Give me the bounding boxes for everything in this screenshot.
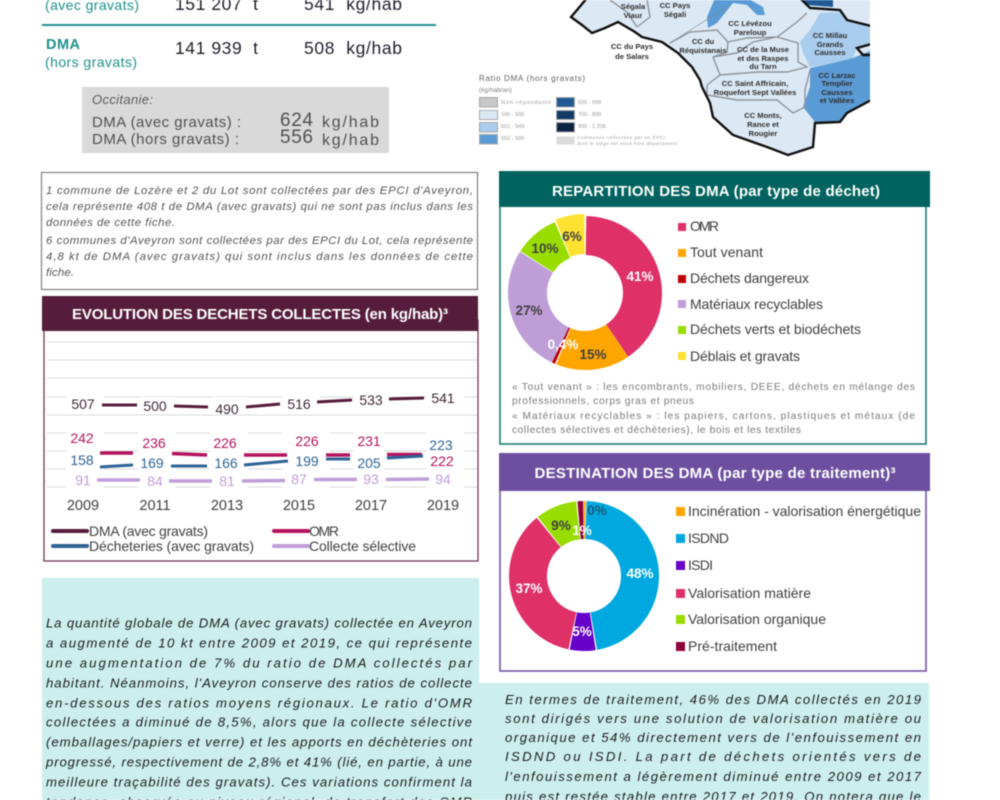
definitions text: professionnels, corps gras et pneus <box>512 396 694 407</box>
donut chart: waste types: 10% <box>531 241 559 256</box>
note box: communes outside the department: fiche. <box>46 267 74 279</box>
text block: collection commentary: une augmentation de 7% du ratio de DMA collectés par <box>46 656 473 670</box>
map labels <box>611 1 856 138</box>
key figures table: 141 939 t <box>175 38 258 58</box>
map labels: CC Saint Affricain, <box>722 79 788 88</box>
legend: treatment types <box>676 503 921 654</box>
text block: collection commentary: progressé, respectivement de 2,8% et 41% (lié, en partie, à une <box>45 754 472 770</box>
legend: treatment types: ISDND <box>688 530 729 546</box>
line chart: 169 <box>140 455 164 471</box>
map labels: et Vallées <box>820 96 854 105</box>
map legend: Non-répondants <box>501 100 551 106</box>
donut chart: treatment types: 1% <box>572 523 592 538</box>
map labels: Causses <box>814 48 846 57</box>
heading: destination <box>499 453 930 491</box>
map legend: Ratio DMA (hors gravats) <box>479 74 585 83</box>
line chart: 2009 <box>67 498 99 514</box>
map legend: 501 - 549 <box>501 124 524 130</box>
legend: waste types: Déchets dangereux <box>690 270 809 286</box>
map labels: CC Pays <box>660 1 690 10</box>
text block: treatment commentary: En termes de traitement, 46% des DMA collectés en 2019 <box>505 692 922 707</box>
heading: evolution <box>42 296 478 331</box>
donut chart: treatment types: 48% <box>626 566 654 581</box>
line chart: 2017 <box>355 498 387 514</box>
map: DMA ratio by EPCI <box>571 0 875 155</box>
donut chart: treatment types: 0% <box>587 503 607 518</box>
line chart: 222 <box>430 453 454 469</box>
donut chart: treatment types <box>505 497 663 655</box>
line chart: 226 <box>295 433 319 449</box>
chart legend: OMR <box>309 523 339 539</box>
key figures table: 508 kg/hab <box>304 38 402 58</box>
chart legend: Décheteries (avec gravats) <box>89 538 254 554</box>
donut chart: waste types: 6% <box>562 229 582 244</box>
map labels: Rance et <box>747 120 779 129</box>
panel: evolution of collected waste <box>42 296 478 561</box>
map legend <box>479 74 678 146</box>
note box: communes outside the department: 4,8 kt de DMA (avec gravats) qui sont inclus dans les données de cette <box>46 251 473 263</box>
map labels: Rougier <box>749 129 777 138</box>
note box: communes outside the department <box>42 172 478 290</box>
donut chart: waste types <box>505 213 665 373</box>
legend: treatment types: Incinération - valorisation énergétique <box>688 503 921 519</box>
line chart: 91 <box>75 472 91 488</box>
line chart: 87 <box>291 471 307 487</box>
legend: waste types: Déblais et gravats <box>690 348 800 364</box>
line chart: 242 <box>70 430 94 446</box>
text block: collection commentary: (emballages/papiers et verre) et les apports en déchèteries ont <box>46 734 473 750</box>
map labels: du Tarn <box>749 62 777 71</box>
note box: communes outside the department: 1 commune de Lozère et 2 du Lot sont collectées par des EPCI d'Aveyron, <box>46 185 473 197</box>
note box: communes outside the department: 6 communes d'Aveyron sont collectées par des EPCI du Lot, cela représente <box>46 235 473 247</box>
regional comparison box: Occitanie: Occitanie: <box>92 92 153 107</box>
line chart <box>66 390 464 514</box>
map labels: Viaur <box>624 11 642 20</box>
key figures table: DMA <box>46 37 81 53</box>
text block: collection commentary: en-dessous des ratios moyens régionaux. Le ratio d'OMR <box>46 696 472 710</box>
text block: collection commentary: collectées a diminué de 8,5%, alors que la collecte sélective <box>46 714 472 730</box>
chart legend <box>53 523 416 554</box>
panel: destination by treatment <box>499 453 930 671</box>
donut chart: treatment types: 5% <box>572 624 592 639</box>
line chart: 507 <box>71 396 95 412</box>
text block: treatment commentary: organique et 54% directement vers de l'enfouissement en <box>505 730 921 745</box>
map legend: Communes collectées par un EPCI <box>577 135 665 140</box>
heading: distribution <box>499 171 930 207</box>
line chart: 199 <box>295 453 319 469</box>
key figures table: (hors gravats) <box>45 54 137 70</box>
regional comparison box: Occitanie: DMA (avec gravats) : <box>92 114 241 131</box>
legend: treatment types: Valorisation organique <box>688 611 826 627</box>
text block: treatment commentary: ISDND ou ISDI. La part de déchets orientés vers de <box>505 749 921 764</box>
panel: distribution by waste type <box>499 171 930 444</box>
text block: treatment commentary: l'enfouissement a légèrement diminué entre 2009 et 2017 <box>505 769 922 784</box>
line chart: 94 <box>435 471 451 487</box>
line chart: 2019 <box>427 498 459 514</box>
line chart: 166 <box>214 455 238 471</box>
heading: destination: DESTINATION DES DMA (par type de traitement)³ <box>534 465 896 482</box>
map labels: Templier <box>821 79 853 88</box>
map labels: Roquefort Sept Vallées <box>714 88 796 97</box>
regional comparison box: Occitanie: 556 <box>280 127 313 148</box>
definitions text <box>512 382 915 436</box>
map labels: Pareloup <box>734 28 767 37</box>
text block: collection commentary: a augmenté de 10 kt entre 2009 et 2019, ce qui représente <box>46 636 472 650</box>
note box: communes outside the department: cela représente 408 t de DMA (avec gravats) qui ne sont pas inclus dans les <box>46 201 473 213</box>
chart legend: DMA (avec gravats) <box>89 523 208 539</box>
donut chart: treatment types: 9% <box>551 518 571 533</box>
map legend: (kg/hab/an) <box>479 87 512 94</box>
line chart: 84 <box>147 473 163 489</box>
key figures table <box>42 0 436 70</box>
donut chart: waste types: 41% <box>626 269 654 284</box>
line chart: 236 <box>142 435 166 451</box>
line chart: 2011 <box>139 498 171 514</box>
line chart: 541 <box>431 390 455 406</box>
definitions text: « Matériaux recyclables » : les papiers, cartons, plastiques et métaux (de <box>512 411 915 422</box>
text block: collection commentary <box>42 578 479 800</box>
regional comparison box: Occitanie: kg/hab <box>322 132 379 149</box>
line chart: 2015 <box>283 498 315 514</box>
regional comparison box: Occitanie: kg/hab <box>322 114 379 131</box>
map labels: Réquistanais <box>679 46 727 55</box>
line chart: 158 <box>70 452 94 468</box>
map legend: dont le siège est situé hors département <box>577 141 678 146</box>
heading: evolution: EVOLUTION DES DECHETS COLLECTES (en kg/hab)³ <box>72 306 448 323</box>
line chart: 81 <box>219 473 235 489</box>
map labels: Ségali <box>664 10 686 19</box>
text block: treatment commentary: sont dirigés vers une solution de valorisation matière ou <box>505 711 922 726</box>
donut chart: waste types: 0,4% <box>548 337 578 352</box>
legend: waste types: Tout venant <box>690 244 763 260</box>
line chart: 93 <box>363 471 379 487</box>
definitions text: collectes sélectives et déchèteries), le bois et les textiles <box>512 425 801 436</box>
line chart: 490 <box>215 401 239 417</box>
map labels: CC de la Muse <box>737 45 789 54</box>
map labels: de Salars <box>615 52 649 61</box>
map legend: 600 - 699 <box>578 100 601 106</box>
map labels: CC du Pays <box>611 42 653 51</box>
text block: collection commentary: habitant. Néanmoins, l'Aveyron conserve des ratios de collecte <box>46 676 472 690</box>
line chart: 533 <box>359 392 383 408</box>
regional comparison box: Occitanie: 624 <box>280 110 313 131</box>
legend: waste types: Déchets verts et biodéchets <box>690 321 861 337</box>
donut chart: waste types: 15% <box>579 347 607 362</box>
line chart: 226 <box>213 435 237 451</box>
line chart: 2013 <box>211 498 243 514</box>
text block: collection commentary: La quantité globale de DMA (avec gravats) collectée en Aveyron <box>46 616 472 630</box>
legend: waste types: Matériaux recyclables <box>690 296 823 312</box>
note box: communes outside the department: données de cette fiche. <box>46 217 175 229</box>
legend: treatment types: ISDI <box>688 557 713 573</box>
donut chart: waste types: 27% <box>515 303 543 318</box>
legend: treatment types: Valorisation matière <box>688 585 811 601</box>
donut chart: treatment types: 37% <box>515 581 543 596</box>
regional comparison box: Occitanie: DMA (hors gravats) : <box>92 131 239 148</box>
text block: treatment commentary <box>479 683 929 800</box>
line chart: 205 <box>357 455 381 471</box>
line chart: 516 <box>287 396 311 412</box>
map labels: CC Lévézou <box>728 19 772 28</box>
line chart: 231 <box>357 433 381 449</box>
definitions text: « Tout venant » : les encombrants, mobiliers, DEEE, déchets en mélange des <box>512 382 915 393</box>
legend: waste types <box>678 218 861 364</box>
map labels: et des Raspes <box>737 54 789 63</box>
map legend: 900 - 1 208 <box>578 124 606 130</box>
map labels: Grands <box>817 40 843 49</box>
map legend: 550 - 599 <box>501 136 524 142</box>
line chart: 500 <box>143 398 167 414</box>
map labels: CC Larzac <box>818 71 856 80</box>
regional comparison box: Occitanie <box>82 87 389 153</box>
map labels: Ségala <box>621 2 646 11</box>
map labels: CC du <box>692 37 715 46</box>
map labels: Causses <box>821 88 853 97</box>
chart legend: Collecte sélective <box>309 538 416 554</box>
map legend: 700 - 899 <box>578 112 601 118</box>
legend: treatment types: Pré-traitement <box>688 638 777 654</box>
map labels: CC Millau <box>813 31 848 40</box>
line chart: 223 <box>429 437 453 453</box>
map labels: CC Monts, <box>744 111 782 120</box>
map legend: 196 - 500 <box>501 112 524 118</box>
text block: collection commentary: meilleure traçabilité des gravats). Ces variations confirment la <box>46 774 472 790</box>
legend: waste types: OMR <box>690 218 719 234</box>
heading: distribution: REPARTITION DES DMA (par type de déchet) <box>552 183 880 200</box>
